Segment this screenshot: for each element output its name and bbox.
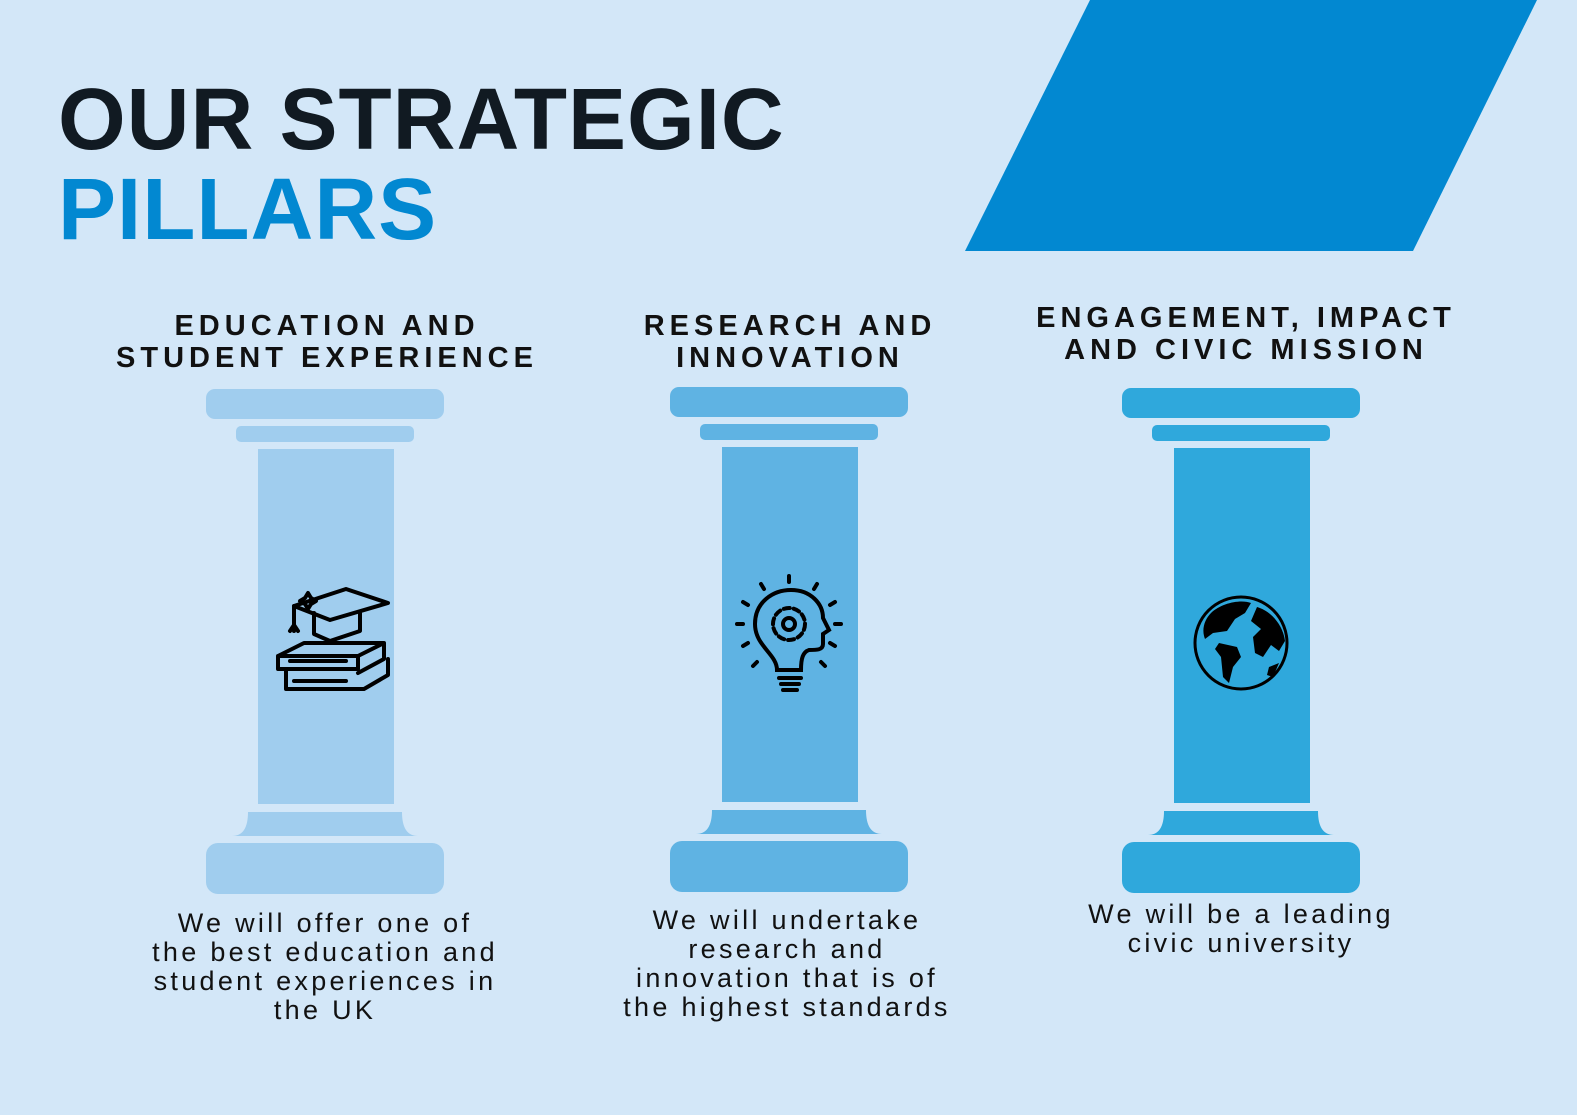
heading: AND CIVIC MISSION (1064, 334, 1428, 366)
text block: civic university (1128, 928, 1354, 958)
heading (644, 310, 936, 374)
decorative parallelogram (965, 0, 1537, 251)
text block: the UK (274, 995, 376, 1025)
text block: We will offer one of (178, 908, 472, 938)
pillar (1122, 388, 1360, 893)
pillar (670, 387, 908, 892)
icon: globe (1195, 597, 1287, 689)
icon: lightbulb head with gear (737, 576, 841, 690)
text block: We will be a leading (1088, 899, 1394, 929)
text block: student experiences in (154, 966, 496, 996)
text block: the highest standards (623, 992, 951, 1022)
text block: innovation that is of (636, 963, 938, 993)
heading: EDUCATION AND (174, 310, 480, 342)
text block: We will undertake (653, 905, 921, 935)
text block (1088, 899, 1394, 958)
title (58, 71, 785, 258)
heading: RESEARCH AND (644, 310, 936, 342)
heading (116, 310, 538, 374)
heading: ENGAGEMENT, IMPACT (1036, 302, 1456, 334)
title: PILLARS (58, 161, 437, 258)
heading: STUDENT EXPERIENCE (116, 342, 538, 374)
heading (1036, 302, 1456, 366)
text block: the best education and (152, 937, 498, 967)
panel: education (116, 310, 538, 1025)
title: OUR STRATEGIC (58, 71, 785, 168)
panel: engagement (1036, 302, 1456, 958)
heading: INNOVATION (676, 342, 904, 374)
text block (152, 908, 498, 1025)
pillar (206, 389, 444, 894)
text block (623, 905, 951, 1022)
panel: research (623, 310, 951, 1022)
text block: research and (688, 934, 886, 964)
icon: graduation cap and books (278, 589, 388, 689)
